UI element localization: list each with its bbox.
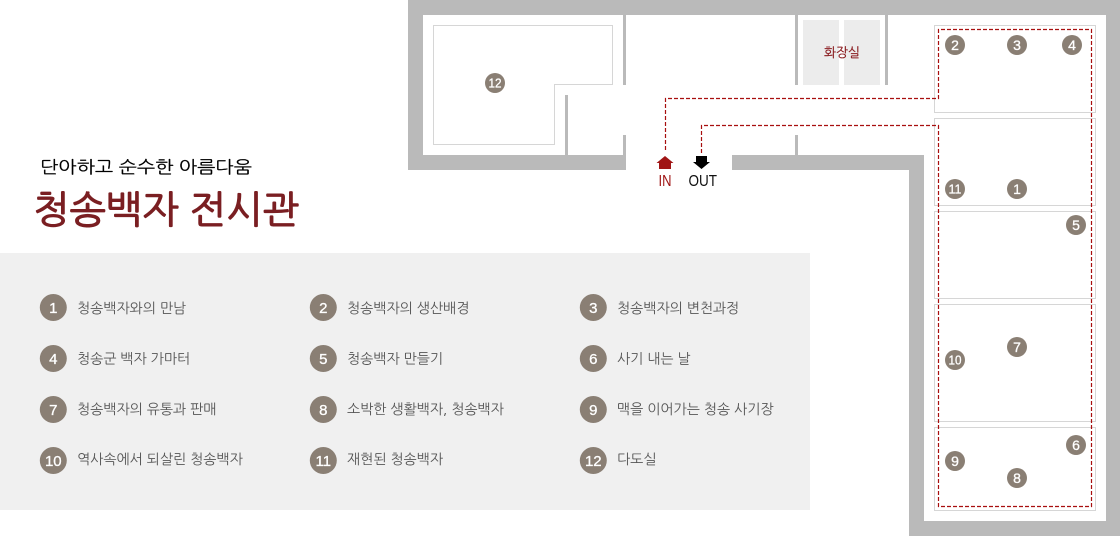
legend item 6 [580,345,691,372]
legend item 12: 12 [585,453,602,470]
map markers: 2 [951,37,959,53]
legend item 3: 3 [589,300,597,317]
legend item 5 [310,345,443,372]
map markers: 12 [488,76,502,90]
legend item 4 [40,345,190,372]
restroom [803,20,880,85]
legend item 4: 4 [49,351,57,368]
legend item 1 [40,294,187,321]
legend item 6: 사기 내는 날 [617,352,691,366]
title: 청송백자 전시관 [33,191,299,229]
legend item 2: 2 [319,300,327,317]
map markers: 10 [948,352,962,368]
legend item 9: 맥을 이어가는 청송 사기장 [617,402,774,417]
legend item 10: 역사속에서 되살린 청송백자 [77,452,244,467]
legend item 2: 청송백자의 생산배경 [347,301,469,316]
legend item 3 [580,294,739,321]
room 12 outline [434,26,612,144]
map markers: 5 [1072,217,1080,233]
map markers: 3 [1013,37,1021,53]
legend item 11: 재현된 청송백자 [347,452,444,467]
map markers: 8 [1013,470,1021,486]
legend item 12: 다도실 [617,452,656,467]
legend item 4: 청송군 백자 가마터 [77,352,190,366]
legend item 10 [40,447,244,474]
legend item 11 [310,447,444,474]
legend item 5: 청송백자 만들기 [347,352,443,366]
legend item 8: 8 [319,402,327,419]
legend item 7: 7 [49,402,57,419]
legend item 9: 9 [589,402,597,419]
subtitle: 단아하고 순수한 아름다움 [40,158,252,176]
exit marker [688,156,717,190]
legend item 5: 5 [319,351,327,368]
legend item 7 [40,396,216,423]
map markers: 4 [1068,37,1076,53]
legend item 8: 소박한 생활백자, 청송백자 [347,402,505,417]
exhibition rooms [934,26,1096,510]
map markers: 7 [1013,339,1021,355]
legend item 12 [580,447,656,474]
legend item 8 [310,396,505,423]
map markers: 6 [1072,437,1080,453]
legend item 3: 청송백자의 변천과정 [617,301,739,316]
legend item 11: 11 [316,453,331,470]
exit marker: OUT [688,173,717,190]
floor plan [408,0,1120,536]
legend item 6: 6 [589,351,597,368]
entrance marker [656,156,674,190]
legend item 2 [310,294,469,321]
legend item 1: 청송백자와의 만남 [77,301,187,316]
legend item 9 [580,396,774,423]
visitor route [666,30,1092,506]
map markers [485,35,1086,488]
map markers: 1 [1013,181,1021,197]
entrance marker: IN [658,173,672,190]
outer walls [408,0,1120,536]
map markers: 11 [948,182,962,196]
legend item 10: 10 [45,453,62,470]
map markers: 9 [951,453,959,469]
inner walls [565,15,888,155]
legend panel [0,253,810,510]
legend item 7: 청송백자의 유통과 판매 [77,402,216,417]
legend item 1: 1 [49,300,57,317]
restroom: 화장실 [824,46,860,59]
